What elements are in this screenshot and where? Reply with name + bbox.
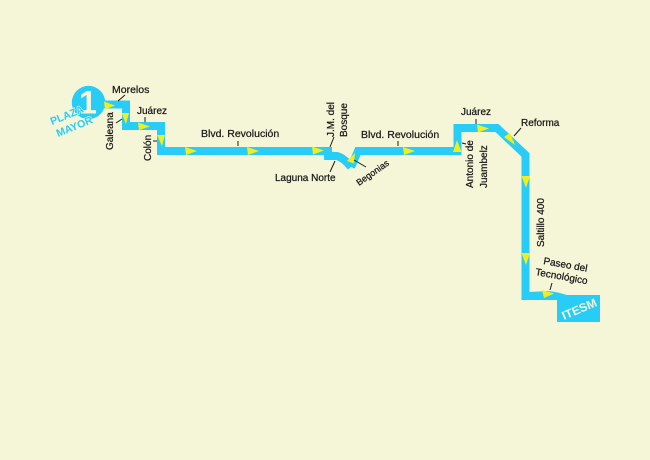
street labels: Antonio de <box>465 140 476 188</box>
street labels: Saltillo 400 <box>536 198 547 247</box>
street labels: Juárez <box>137 106 167 117</box>
street labels: Morelos <box>112 84 149 96</box>
station: Plaza Mayor 1: MAYOR <box>55 114 95 140</box>
street labels: Laguna Norte <box>275 173 336 184</box>
street labels: Tecnológico <box>534 267 589 287</box>
station: Plaza Mayor 1 <box>49 84 105 140</box>
street labels: J.M. del <box>326 102 337 137</box>
street labels: Bosque <box>339 103 350 137</box>
direction arrows <box>104 102 554 298</box>
street labels: Juárez <box>461 107 491 118</box>
terminal: ITESM: ITESM <box>560 296 599 323</box>
station: Plaza Mayor 1: 1 <box>79 84 97 120</box>
street labels: Juambelz <box>479 145 490 188</box>
route line <box>100 104 572 300</box>
street labels: Galeana <box>105 112 116 150</box>
station: Plaza Mayor 1: PLAZA <box>49 103 86 128</box>
street labels <box>105 84 589 287</box>
leader lines <box>116 95 552 290</box>
street labels: Blvd. Revolución <box>201 128 279 140</box>
street labels: Begonias <box>354 158 391 188</box>
street labels: Reforma <box>521 118 560 129</box>
street labels: Paseo del <box>542 256 588 275</box>
street labels: Blvd. Revolución <box>361 129 439 141</box>
street labels: Colón <box>143 135 154 161</box>
